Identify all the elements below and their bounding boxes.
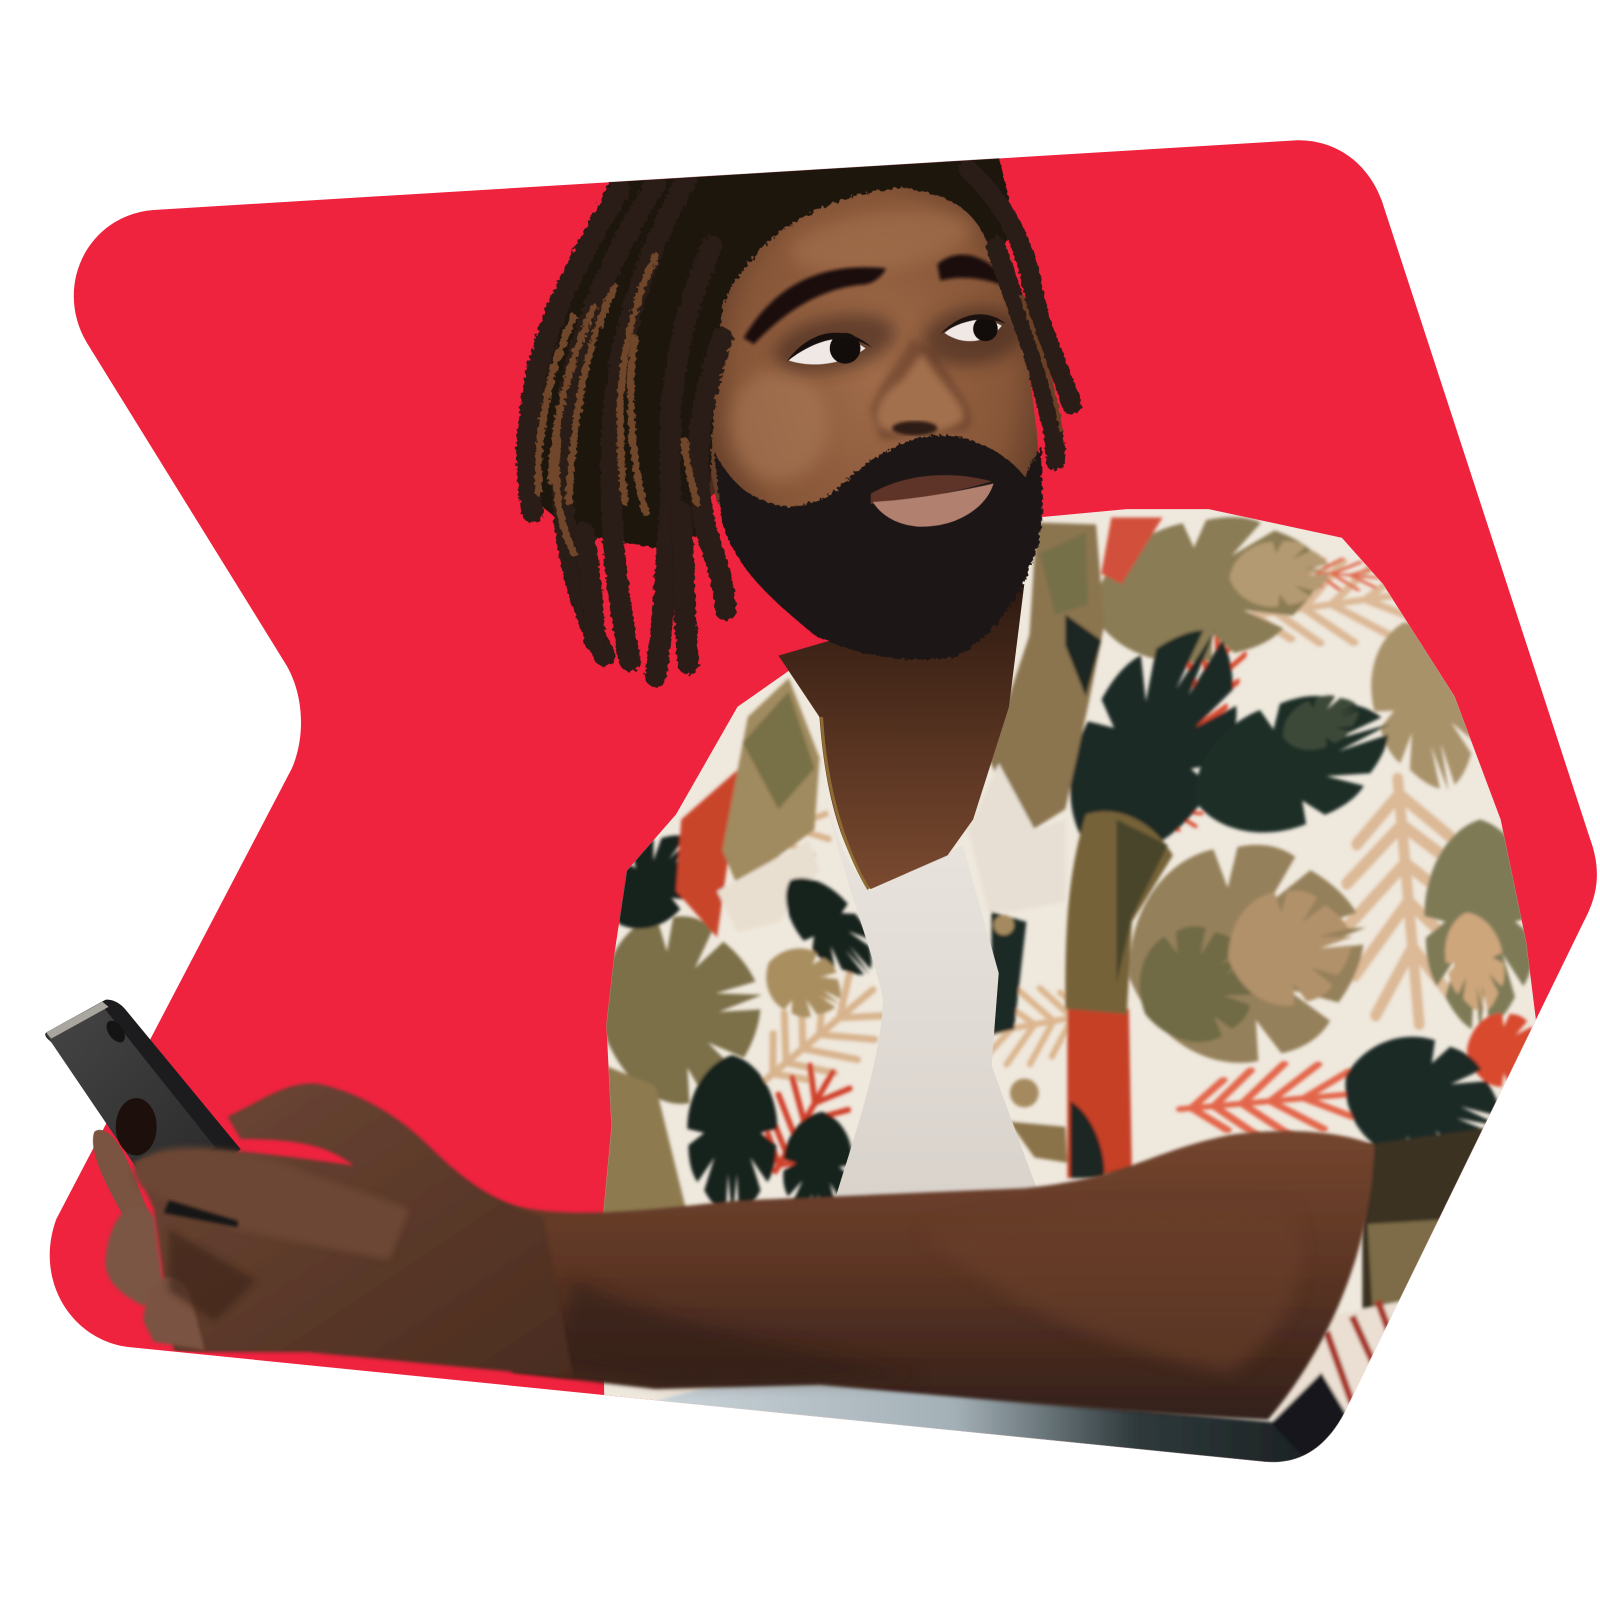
phone body — [45, 1000, 241, 1204]
finger shadow — [169, 1229, 256, 1321]
hair cap — [524, 143, 1014, 548]
phone — [45, 1000, 241, 1204]
right brow — [935, 253, 1000, 286]
nose shade — [871, 338, 971, 440]
shirt — [584, 496, 1545, 1475]
man (clipped to the arrow) — [492, 143, 1545, 1485]
head — [524, 143, 1071, 676]
rear finger — [93, 1130, 154, 1224]
cheek highlight — [729, 369, 828, 481]
t-shirt — [825, 794, 1037, 1217]
hair locks right — [968, 169, 1071, 461]
buttons — [994, 915, 1014, 935]
thumb and back of hand — [133, 1083, 574, 1378]
right eye — [940, 314, 1006, 341]
hair — [524, 143, 1071, 676]
forearm tendon shadow — [564, 1282, 858, 1395]
finger shadow on phone — [116, 1098, 157, 1155]
hair locks left — [527, 179, 725, 676]
eye socket shadows — [769, 304, 900, 382]
phone top edge — [46, 1002, 109, 1039]
neck — [778, 584, 1024, 889]
left panel leaves — [606, 914, 762, 1106]
phone edge between fingers — [164, 1201, 238, 1227]
nose — [877, 353, 963, 433]
jeans — [656, 1384, 1300, 1462]
forehead highlight — [792, 208, 972, 270]
red arrow background shape — [50, 140, 1597, 1462]
gold necklace — [822, 717, 869, 889]
hand — [93, 1083, 574, 1378]
lower lip — [873, 483, 994, 527]
hair tips lit — [538, 256, 697, 553]
beard — [714, 435, 1042, 660]
left brow — [744, 267, 886, 344]
elbow highlight — [994, 1266, 1292, 1374]
ear — [708, 464, 715, 496]
face skin — [710, 186, 1043, 516]
upper lip — [871, 475, 992, 504]
lower shirt under the arm — [1362, 1127, 1496, 1332]
left eye — [787, 333, 873, 364]
nostril — [892, 421, 937, 435]
middle finger — [105, 1206, 164, 1306]
front placket panels — [1067, 1004, 1132, 1178]
shirt base — [602, 509, 1536, 1475]
camera — [103, 1017, 129, 1046]
collar right — [988, 522, 1104, 835]
ring finger — [143, 1277, 205, 1350]
phone back — [46, 1006, 215, 1193]
forearm — [492, 1131, 1375, 1420]
index finger — [134, 1147, 410, 1260]
shirt leaf pattern — [584, 496, 1545, 1465]
